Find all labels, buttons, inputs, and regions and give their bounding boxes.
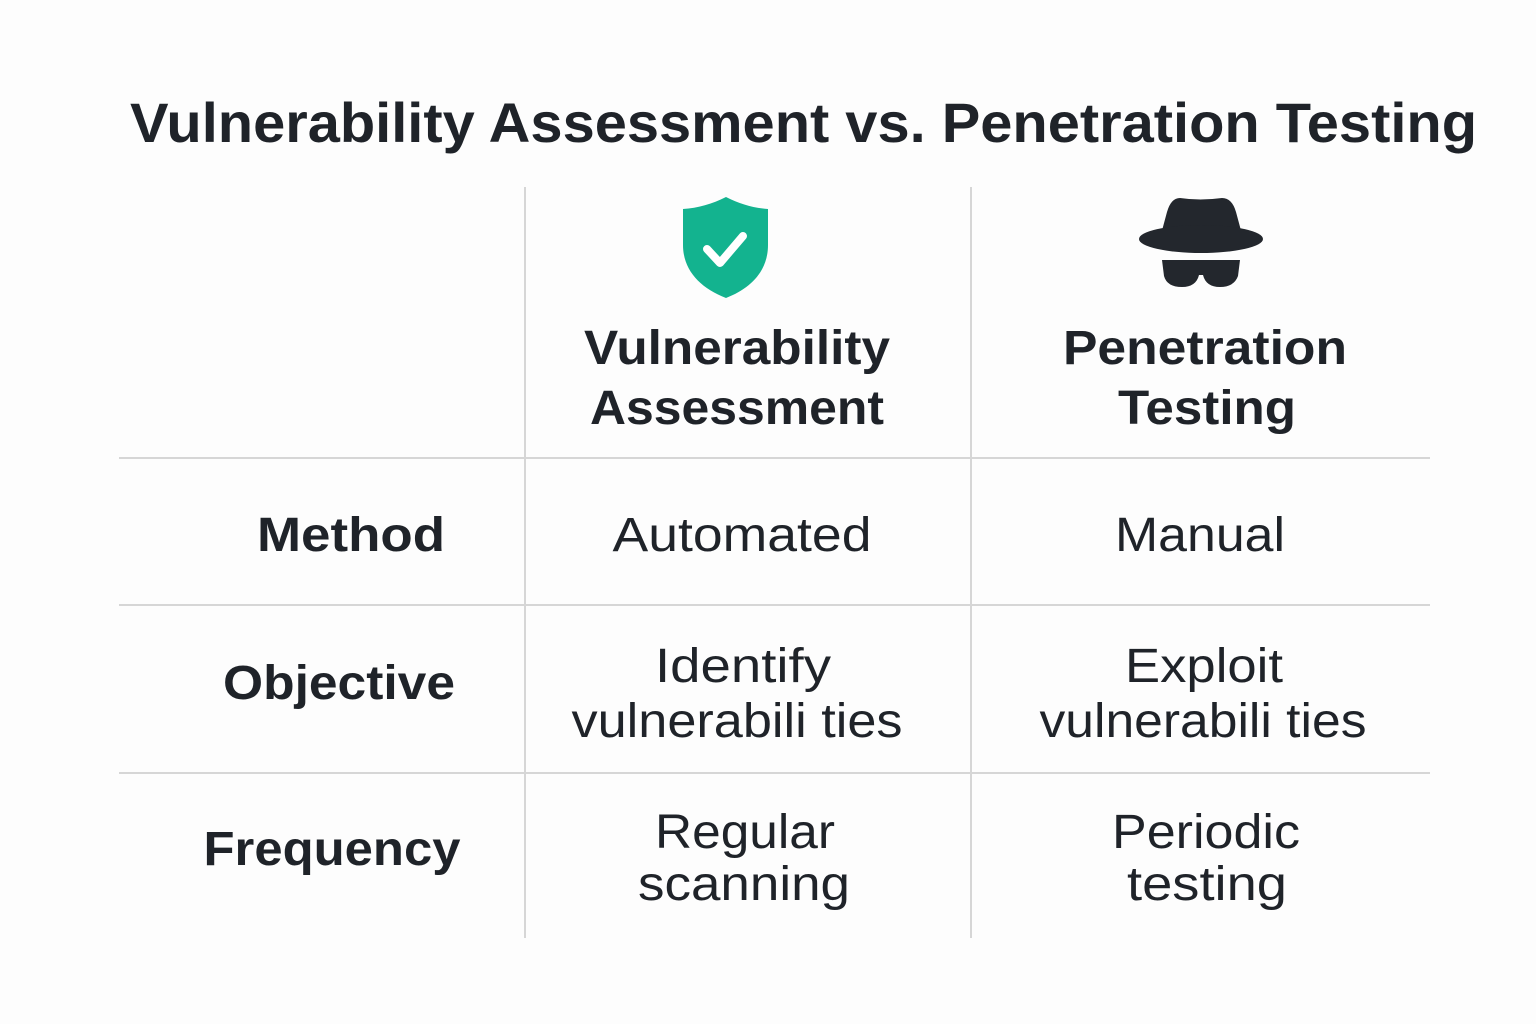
cell: Periodic testing: testing — [1127, 858, 1287, 911]
cell: Periodic testing — [1112, 806, 1300, 911]
cell: Automated: Automated — [612, 509, 872, 562]
cell: Identify vulnerabilities — [572, 640, 902, 748]
cell: Periodic testing: Periodic — [1112, 806, 1300, 859]
column header: Vulnerability Assessment: Vulnerability — [584, 322, 890, 375]
icon: spy hat and glasses — [1139, 198, 1263, 287]
cell: Identify vulnerabilities: vulnerabili ties — [572, 695, 902, 748]
column header: Penetration Testing: Testing — [1118, 382, 1296, 435]
row label: Objective: Objective — [223, 657, 455, 710]
cell: Exploit vulnerabilities: Exploit — [1125, 640, 1283, 693]
column header: Penetration Testing: Penetration — [1063, 322, 1347, 375]
icon: shield with check — [683, 197, 768, 298]
cell: Regular scanning: Regular — [655, 806, 835, 859]
cell: Manual: Manual — [1115, 509, 1285, 562]
cell: Exploit vulnerabilities: vulnerabili ties — [1040, 695, 1366, 748]
column header: Vulnerability Assessment: Assessment — [590, 382, 884, 435]
row label: Frequency: Frequency — [204, 823, 461, 876]
column header: Penetration Testing — [1063, 322, 1347, 435]
cell: Identify vulnerabilities: Identify — [655, 640, 831, 693]
cell: Exploit vulnerabilities — [1040, 640, 1366, 748]
cell: Regular scanning — [638, 806, 850, 911]
title: Vulnerability Assessment vs. Penetration Testing — [130, 91, 1477, 154]
cell: Regular scanning: scanning — [638, 858, 850, 911]
row label: Method: Method — [257, 509, 445, 562]
column header: Vulnerability Assessment — [584, 322, 890, 435]
